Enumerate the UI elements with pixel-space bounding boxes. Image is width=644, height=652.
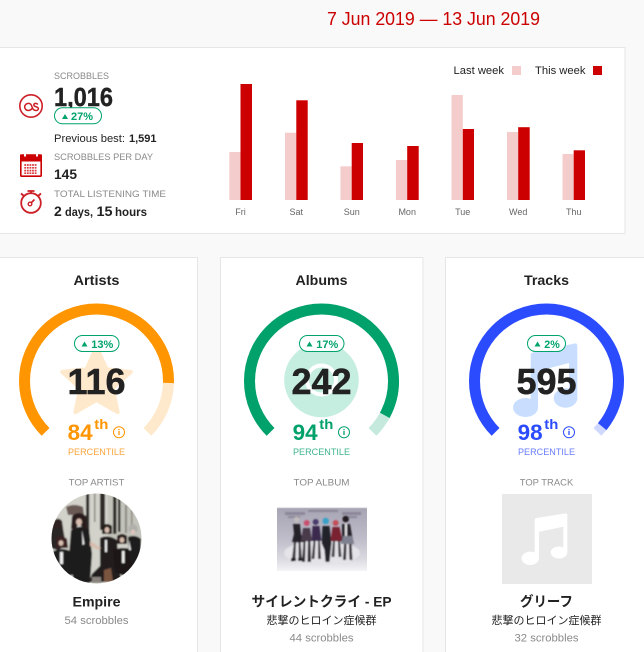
- top artist name: Empire: [72, 594, 121, 610]
- top album label: TOP ALBUM: [294, 478, 350, 488]
- change badge: artists: [74, 336, 119, 352]
- percentile label: albums: PERCENTILE: [293, 447, 350, 458]
- scrobbles value: 1,016: [54, 82, 113, 112]
- icon: info tracks: [564, 427, 574, 438]
- top track artist: 悲撃のヒロイン症候群: [492, 613, 602, 627]
- panel: albums: [220, 258, 423, 652]
- total listening time label: TOTAL LISTENING TIME: [54, 189, 166, 199]
- scrobbles label: SCROBBLES: [54, 71, 109, 81]
- total listening time value: 15: [96, 203, 113, 219]
- change badge: tracks: 2%: [544, 339, 560, 351]
- top album scrobbles: 44 scrobbles: [290, 633, 354, 645]
- icon: last.fm logo: [20, 95, 42, 117]
- scrobbles change badge: [54, 108, 102, 124]
- chart legend: This week: [535, 65, 586, 77]
- icon: calendar: [20, 153, 42, 176]
- top track scrobbles: 32 scrobbles: [514, 633, 579, 645]
- percentile: albums: 94: [293, 420, 318, 445]
- value: albums: 242: [291, 361, 352, 402]
- gauge: artists 84th percentile: [25, 309, 168, 432]
- bar chart: scrobbles by day: Sat: [289, 207, 303, 217]
- heading: albums: Albums: [296, 272, 348, 288]
- heading: tracks: Tracks: [524, 272, 569, 288]
- icon: star watermark: [62, 347, 131, 412]
- value: artists: 116: [67, 361, 126, 402]
- percentile: albums: [293, 416, 333, 445]
- image: top track placeholder: [502, 494, 592, 584]
- bar chart: scrobbles by day: [229, 84, 585, 217]
- top album title: サイレントクライ - EP: [252, 594, 392, 610]
- previous best: 1,591: [129, 133, 156, 145]
- bar chart: scrobbles by day: Wed: [509, 207, 527, 217]
- icon: music note watermark: [513, 343, 577, 417]
- bar chart: scrobbles by day: Tue: [455, 207, 470, 217]
- image: top artist photo: [50, 492, 144, 586]
- chart legend: [454, 65, 602, 77]
- previous best: [54, 133, 156, 145]
- percentile: tracks: th: [544, 416, 558, 432]
- total listening time value: 2: [54, 203, 62, 219]
- bar chart: scrobbles by day: Mon: [398, 207, 416, 217]
- percentile: artists: th: [94, 416, 108, 432]
- percentile: albums: th: [319, 416, 333, 432]
- scrobbles per day label: SCROBBLES PER DAY: [54, 152, 153, 162]
- gauge: tracks 98th percentile: [474, 309, 619, 432]
- panel: artists: [0, 258, 198, 652]
- icon: vinyl watermark: [284, 343, 359, 417]
- percentile: artists: 84: [68, 420, 93, 445]
- scrobbles per day value: 145: [54, 166, 77, 182]
- icon: stopwatch: [21, 191, 41, 213]
- percentile label: tracks: PERCENTILE: [518, 447, 575, 458]
- change badge: artists: 13%: [91, 339, 114, 351]
- percentile label: artists: PERCENTILE: [68, 447, 125, 458]
- change badge: albums: [300, 336, 344, 352]
- top album artist: 悲撃のヒロイン症候群: [266, 613, 376, 627]
- icon: info artists: [114, 427, 124, 438]
- bar chart: scrobbles by day: Thu: [566, 207, 581, 217]
- image: top album cover: [277, 507, 367, 571]
- total listening time value: [54, 203, 147, 219]
- heading: artists: Artists: [74, 272, 120, 288]
- title: date range: 7 Jun 2019 — 13 Jun 2019: [327, 9, 540, 29]
- percentile: tracks: [518, 416, 558, 445]
- percentile: tracks: 98: [518, 420, 543, 445]
- bar chart: scrobbles by day: Sun: [344, 207, 360, 217]
- bar chart: scrobbles by day: Fri: [235, 207, 246, 217]
- gauge: albums 94th percentile: [250, 309, 393, 432]
- previous best: Previous best:: [54, 133, 125, 145]
- scrobbles change badge: 27%: [71, 111, 93, 123]
- panel: tracks: [446, 258, 644, 652]
- panel: weekly summary: [0, 48, 625, 234]
- top artist scrobbles: 54 scrobbles: [64, 615, 129, 627]
- change badge: tracks: [528, 336, 566, 352]
- top track title: グリーフ: [520, 594, 573, 610]
- percentile: artists: [68, 416, 108, 445]
- value: tracks: 595: [516, 361, 577, 402]
- change badge: albums: 17%: [316, 339, 339, 351]
- icon: info albums: [338, 427, 350, 438]
- total listening time value: hours: [115, 205, 147, 219]
- total listening time value: days,: [65, 205, 93, 219]
- top artist label: TOP ARTIST: [69, 478, 125, 488]
- chart legend: Last week: [454, 65, 505, 77]
- top track label: TOP TRACK: [520, 478, 573, 488]
